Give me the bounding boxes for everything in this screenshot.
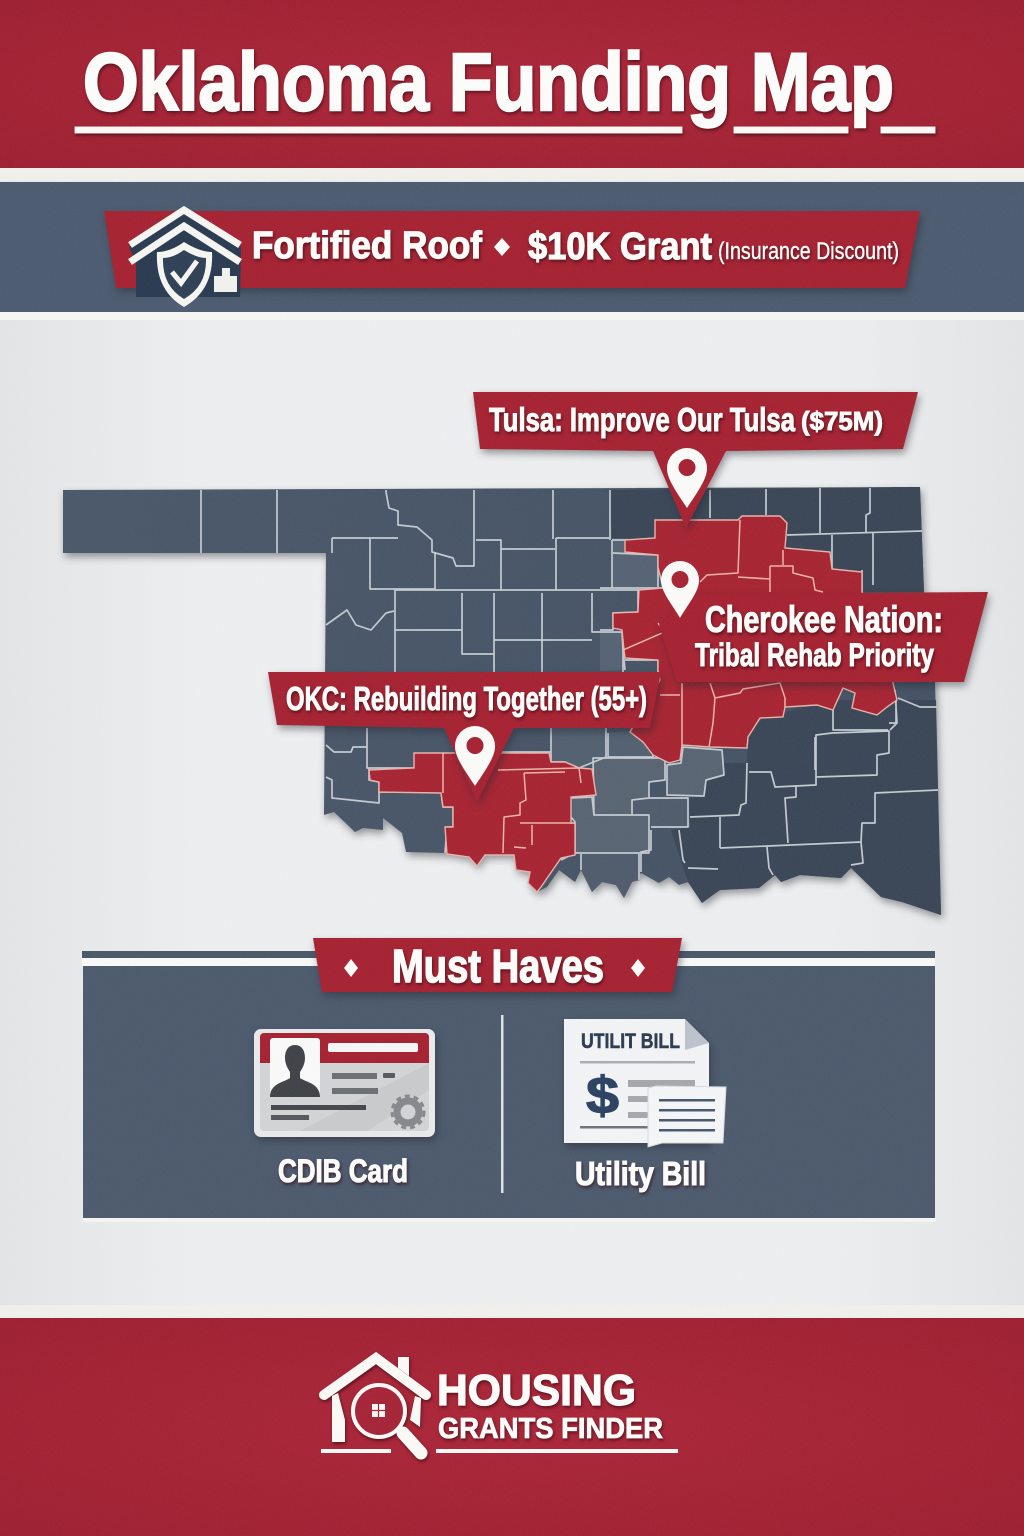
county lines <box>201 488 938 880</box>
text: Tulsa amount: ($75M) <box>801 406 883 436</box>
callout: Cherokee Nation <box>659 561 988 682</box>
grant band <box>0 182 1024 320</box>
text: fortified roof: Fortified Roof <box>252 225 482 267</box>
icon: fortified house shield <box>129 207 241 307</box>
diamond separator <box>494 238 510 256</box>
text: grant amount: $10K Grant <box>528 226 712 268</box>
footer band <box>0 1305 1024 1536</box>
callout: Tulsa <box>473 392 918 528</box>
text: must haves: Must Haves <box>392 940 604 992</box>
grant banner ribbon <box>104 211 920 288</box>
page background <box>0 320 1024 1306</box>
text: tribal rehab: Tribal Rehab Priority <box>695 637 934 673</box>
red region: Cherokee Nation <box>613 516 897 763</box>
text: Cherokee Nation: Cherokee Nation: <box>705 599 943 640</box>
text: OKC program: OKC: Rebuilding Together (55+) <box>286 680 647 717</box>
logo: housing grants finder <box>321 1357 678 1453</box>
map of Oklahoma <box>63 487 941 915</box>
text: dollar sign: $ <box>586 1067 619 1125</box>
title underline <box>75 127 935 133</box>
header band <box>0 0 1024 181</box>
icon: Cherokee pin <box>661 561 699 618</box>
callout: OKC <box>268 672 661 802</box>
label: utility bill: Utility Bill <box>575 1155 706 1192</box>
red region: Oklahoma City <box>369 753 596 892</box>
label: CDIB card: CDIB Card <box>278 1153 408 1189</box>
state base <box>63 487 941 915</box>
red region lines: Cherokee <box>623 520 823 747</box>
panel: must haves <box>82 951 936 1222</box>
heading: must haves <box>313 938 682 992</box>
text: Tulsa program: Tulsa: Improve Our Tulsa <box>489 401 795 438</box>
text: housing: HOUSING <box>437 1366 636 1415</box>
grant banner text <box>252 225 899 268</box>
icon: OKC pin <box>455 726 495 786</box>
icon: Tulsa pin <box>667 448 707 508</box>
text: bill heading: UTILIT BILL <box>581 1030 680 1053</box>
title: Oklahoma Funding Map <box>83 37 894 128</box>
icon: utility bill <box>564 1019 726 1147</box>
icon: CDIB card <box>254 1029 435 1137</box>
text: insurance discount: (Insurance Discount) <box>718 238 899 265</box>
divider <box>501 1015 504 1193</box>
central lighter counties <box>551 540 724 898</box>
icon: house with magnifier <box>324 1357 426 1453</box>
text: grants finder: GRANTS FINDER <box>438 1413 663 1445</box>
eastern counties <box>671 700 941 915</box>
northeast counties <box>610 487 924 592</box>
red region lines: OKC <box>443 753 581 853</box>
